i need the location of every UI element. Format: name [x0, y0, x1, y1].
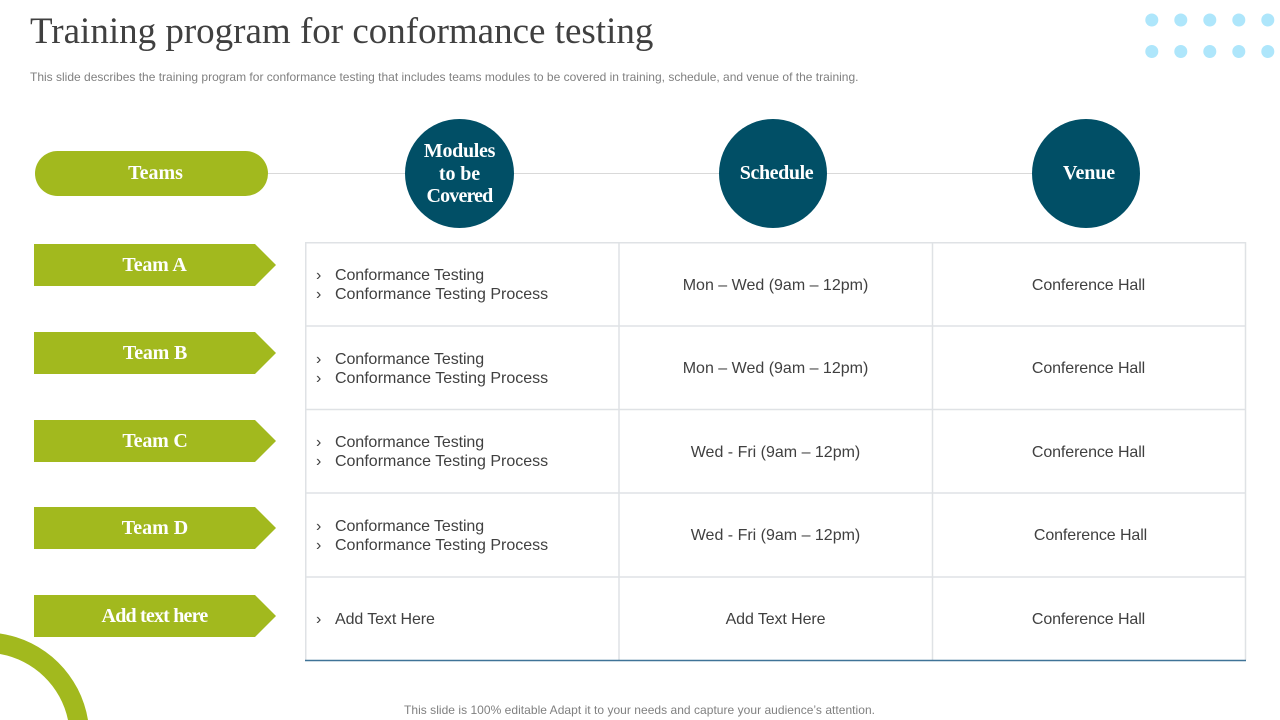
row E cells: › — [316, 611, 321, 628]
icon: decorative dots — [1145, 14, 1274, 58]
row E cells: Conference Hall — [1032, 611, 1145, 628]
circle: Schedule — [719, 119, 827, 228]
row B cells — [316, 351, 1145, 387]
row E cells — [316, 611, 1145, 628]
circle: Schedule: Schedule — [740, 162, 813, 184]
title: Training program for conformance testing — [30, 11, 653, 52]
tag: Team D: Team D — [122, 517, 188, 539]
row A cells: Conformance Testing — [335, 267, 484, 284]
tag: Team C: Team C — [122, 430, 188, 452]
tag: Add text here: Add text here — [102, 605, 207, 627]
row B cells: Conference Hall — [1032, 360, 1145, 377]
tag: Team A: Team A — [122, 254, 187, 276]
tag: Team D — [34, 507, 276, 549]
circle: Venue: Venue — [1063, 162, 1115, 184]
row A cells: Conference Hall — [1032, 277, 1145, 294]
pill: Teams: Teams — [128, 162, 183, 184]
subtitle: This slide describes the training program for conformance testing that includes teams modules to be covered in training, schedule, and venue of the training. — [30, 70, 858, 84]
row A cells — [316, 267, 1145, 303]
row A cells: Mon – Wed (9am – 12pm) — [683, 277, 868, 294]
tag: Add text here — [34, 595, 276, 637]
row A cells: › — [316, 286, 321, 303]
circle: Modules to be Covered — [405, 119, 514, 228]
row C cells: Conformance Testing — [335, 434, 484, 451]
circle: Venue — [1032, 119, 1140, 228]
row C cells — [316, 434, 1145, 470]
row C cells: Conference Hall — [1032, 444, 1145, 461]
row A cells: Conformance Testing Process — [335, 286, 548, 303]
row D cells: Conformance Testing — [335, 518, 484, 535]
row B cells: › — [316, 351, 321, 368]
tag: Team C — [34, 420, 276, 462]
header connector line — [268, 173, 1068, 174]
tag: Team B — [34, 332, 276, 374]
row D cells: Conference Hall — [1034, 527, 1147, 544]
row B cells: Conformance Testing Process — [335, 370, 548, 387]
decorative corner arc — [0, 634, 88, 720]
circle: Modules to be Covered: to be — [439, 163, 480, 185]
row D cells: Conformance Testing Process — [335, 537, 548, 554]
row B cells: Mon – Wed (9am – 12pm) — [683, 360, 868, 377]
table — [305, 242, 1246, 662]
circle: Modules to be Covered: Modules — [424, 140, 495, 162]
row A cells: › — [316, 267, 321, 284]
circle: Modules to be Covered: Covered — [427, 185, 492, 207]
tag: Team B: Team B — [123, 342, 187, 364]
row D cells: › — [316, 518, 321, 535]
row D cells: Wed - Fri (9am – 12pm) — [691, 527, 860, 544]
row C cells: › — [316, 434, 321, 451]
row B cells: › — [316, 370, 321, 387]
row D cells — [316, 518, 1147, 554]
row C cells: › — [316, 453, 321, 470]
tag: Team A — [34, 244, 276, 286]
table grid — [305, 242, 1246, 662]
footer note: This slide is 100% editable Adapt it to your needs and capture your audience’s attention. — [404, 703, 875, 717]
row C cells: Wed - Fri (9am – 12pm) — [691, 444, 860, 461]
row B cells: Conformance Testing — [335, 351, 484, 368]
row D cells: › — [316, 537, 321, 554]
pill: Teams — [35, 151, 268, 196]
row E cells: Add Text Here — [726, 611, 825, 628]
row C cells: Conformance Testing Process — [335, 453, 548, 470]
row E cells: Add Text Here — [335, 611, 435, 628]
